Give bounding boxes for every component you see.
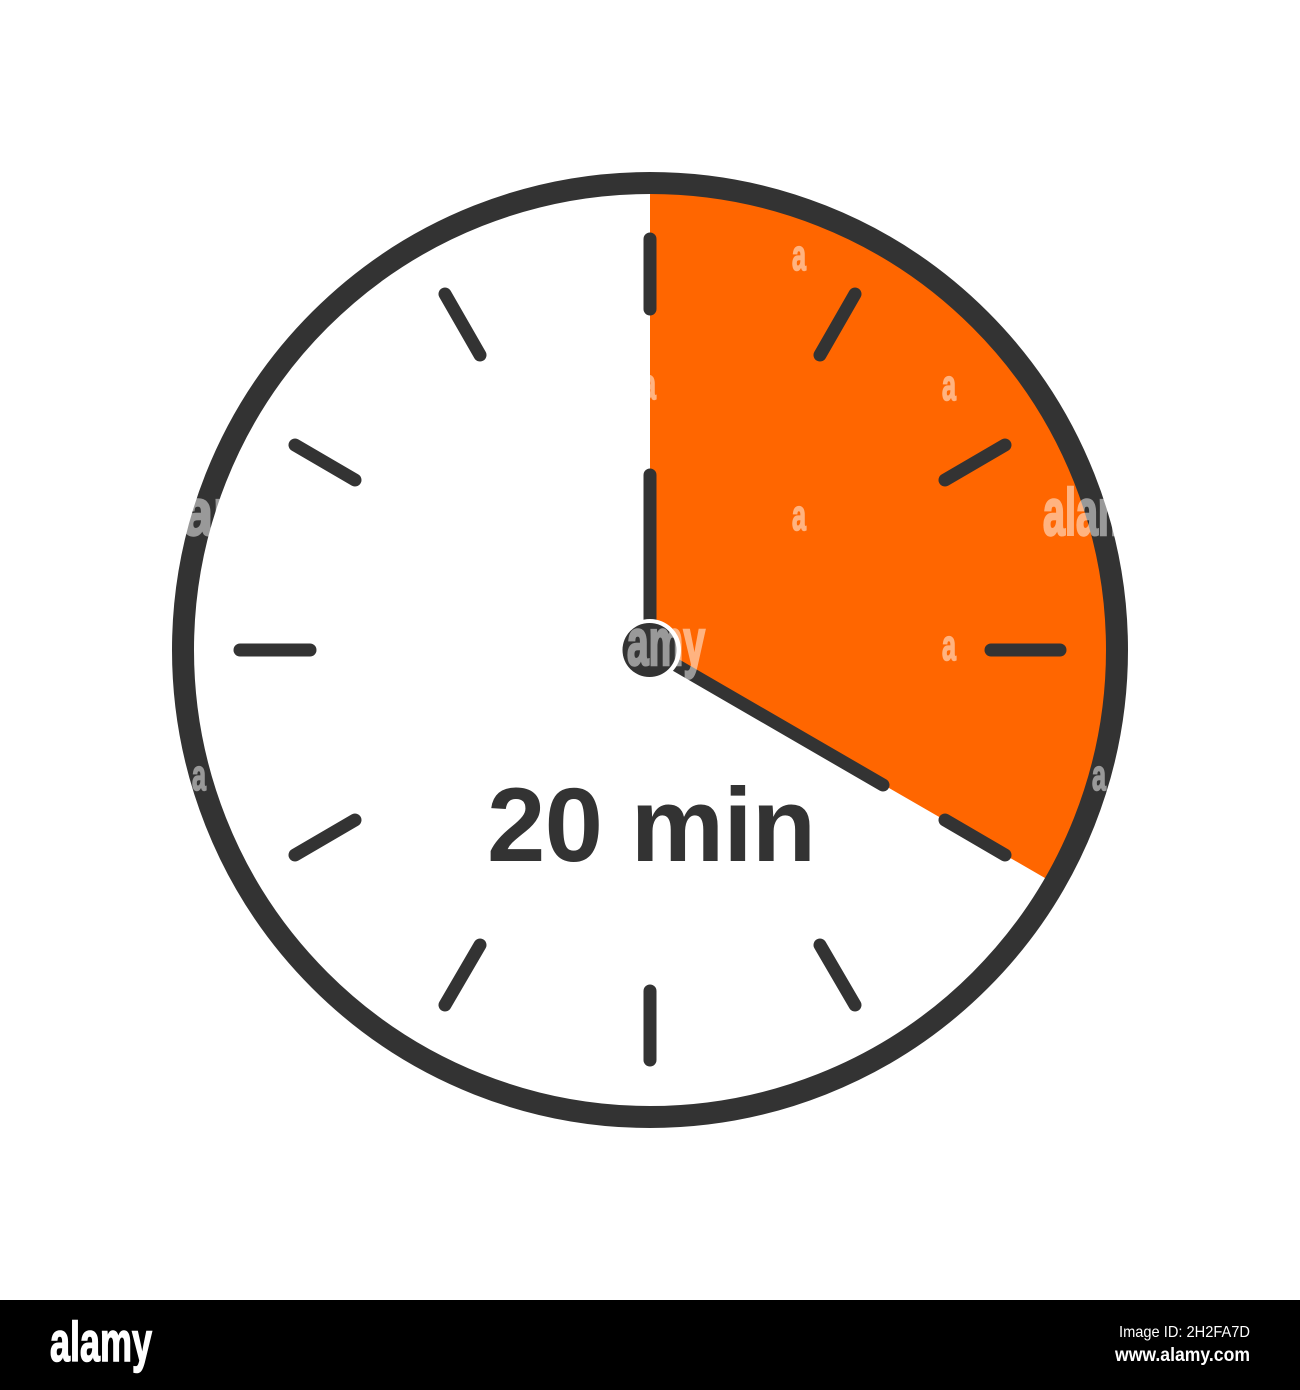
orange 20 minute sector bbox=[650, 190, 1110, 880]
footer bar bbox=[0, 1300, 1300, 1390]
watermark overlay: a bbox=[1092, 751, 1106, 800]
label: 20 min: 20 min bbox=[487, 767, 816, 884]
watermark overlay: a bbox=[642, 360, 656, 409]
watermark overlay bbox=[183, 231, 1155, 800]
footer logo: alamy bbox=[50, 1310, 152, 1373]
clock hands bbox=[650, 475, 883, 785]
centre hub bbox=[619, 619, 681, 681]
watermark overlay: amy bbox=[627, 605, 705, 679]
watermark overlay: alamy bbox=[1043, 475, 1155, 549]
watermark overlay: a bbox=[942, 621, 956, 670]
watermark overlay: am bbox=[183, 475, 261, 549]
watermark overlay: a bbox=[192, 751, 206, 800]
hour tick marks bbox=[240, 239, 1060, 1060]
watermark overlay: a bbox=[942, 361, 956, 410]
watermark overlay: a bbox=[792, 491, 806, 540]
watermark overlay: a bbox=[792, 231, 806, 280]
website: www.alamy.com bbox=[1114, 1345, 1250, 1366]
clock ring bbox=[183, 183, 1117, 1117]
image id: Image ID: 2H2FA7D bbox=[1119, 1324, 1250, 1341]
